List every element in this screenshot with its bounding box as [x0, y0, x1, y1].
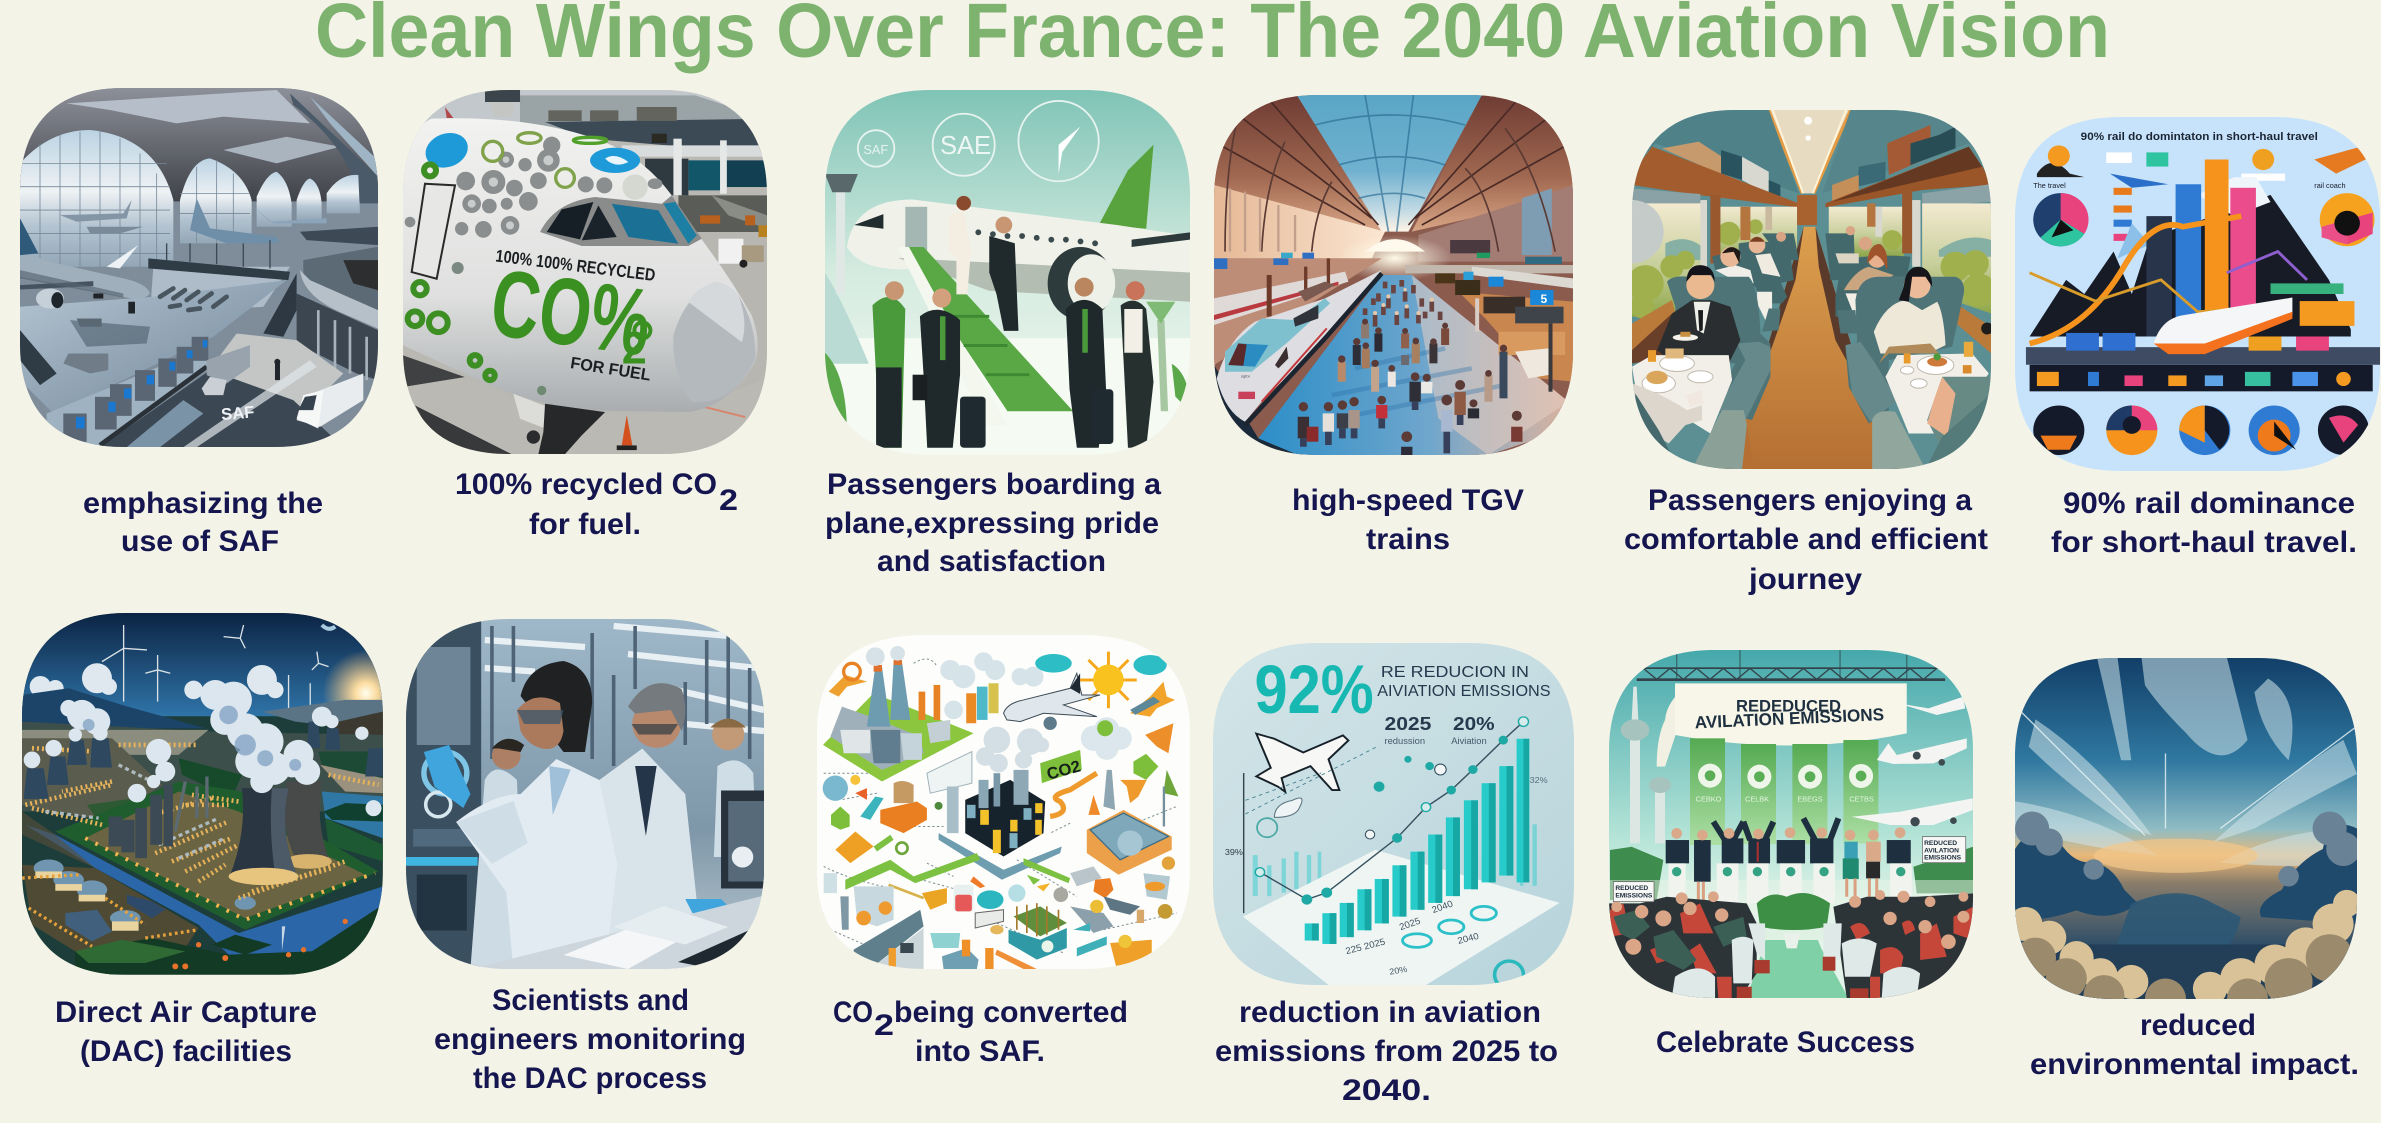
caption: for short-haul travel. — [2051, 526, 2357, 559]
caption: emissions from 2025 to — [1215, 1035, 1558, 1068]
caption: high-speed TGV — [1292, 484, 1524, 517]
caption: the DAC process — [473, 1062, 707, 1095]
image: celebration event: EMISSIONS — [1924, 854, 1962, 861]
panel: celebrate success — [1609, 650, 1973, 1059]
caption — [1624, 484, 1988, 596]
caption — [55, 996, 317, 1068]
image: passengers boarding a plane: SAF — [863, 142, 888, 157]
image: plane nose with CO2 livery: CO% — [485, 250, 657, 377]
image: celebration event: CELBK — [1745, 795, 1769, 804]
image: airport terminal: SAF — [220, 402, 255, 424]
caption: use of SAF — [121, 525, 279, 558]
image: 92 percent reduction chart: 2025 — [1398, 916, 1422, 933]
image: clean sky above clouds — [2015, 658, 2357, 999]
image: 92 percent reduction chart: 20% — [1453, 715, 1495, 735]
caption: comfortable and efficient — [1624, 523, 1988, 556]
panel: CO2 conversion — [817, 635, 1190, 1068]
caption — [434, 984, 746, 1095]
image: isometric CO2 to SAF map — [817, 635, 1190, 969]
caption — [825, 468, 1161, 578]
caption — [455, 468, 738, 541]
image: 92 percent reduction chart: redussion — [1384, 736, 1425, 746]
image: high-speed train station: 5 — [1541, 292, 1548, 306]
image: celebration event — [1609, 650, 1973, 998]
caption: environmental impact. — [2030, 1048, 2359, 1081]
image: 92 percent reduction chart: 225 2025 — [1344, 937, 1387, 957]
caption: Celebrate Success — [1656, 1026, 1915, 1059]
image: 92 percent reduction chart: 20% — [1388, 964, 1408, 977]
caption: 100% recycled CO — [455, 468, 717, 501]
image: high-speed train station — [1214, 95, 1573, 455]
panel: rail dominance — [2015, 117, 2380, 559]
image: 92 percent reduction chart: 2040 — [1456, 931, 1480, 947]
caption: emphasizing the — [83, 487, 323, 520]
caption: Direct Air Capture — [55, 996, 317, 1029]
caption: 2 — [874, 1009, 894, 1042]
image: rail dominance infographic: 90% rail do domintaton in short-haul travel — [2081, 131, 2318, 143]
caption: being converted — [894, 996, 1128, 1029]
caption — [2030, 1009, 2359, 1081]
image: celebration event: REDUCED — [1924, 840, 1957, 847]
caption — [1215, 996, 1558, 1107]
panel: Direct Air Capture — [22, 613, 409, 1068]
caption: 2040. — [1342, 1074, 1431, 1107]
panel: TGV station — [1214, 95, 1573, 556]
caption: into SAF. — [915, 1035, 1045, 1068]
caption — [833, 996, 1128, 1068]
panel: reduced impact — [2008, 658, 2360, 1081]
image: 92 percent reduction chart: 39% — [1225, 847, 1243, 857]
image: celebration event: CEBKO — [1696, 795, 1722, 804]
caption: Scientists and — [492, 984, 689, 1017]
caption: trains — [1366, 523, 1450, 556]
image: rail dominance infographic: The travel — [2033, 181, 2066, 190]
caption — [2051, 487, 2357, 559]
image: 92 percent reduction chart: 2040 — [1430, 899, 1455, 916]
image: rail dominance infographic: rail coach — [2314, 181, 2346, 190]
image: DAC facility at dusk — [22, 613, 383, 975]
caption — [1292, 484, 1524, 556]
caption: reduced — [2140, 1009, 2256, 1042]
caption: CO — [833, 996, 873, 1029]
image: celebration event: CETBS — [1849, 795, 1874, 804]
image: 92 percent reduction chart: 92% — [1255, 651, 1374, 728]
image: celebration event: AVILATION — [1924, 847, 1959, 854]
panel: emissions reduction — [1213, 643, 1574, 1107]
image: train interior dining — [1632, 110, 1991, 469]
caption: for fuel. — [529, 508, 641, 541]
image: airport terminal — [20, 88, 378, 447]
caption: and satisfaction — [877, 545, 1106, 578]
image: celebration event: REDUCED — [1615, 885, 1648, 892]
caption: Passengers enjoying a — [1648, 484, 1972, 517]
caption: reduction in aviation — [1239, 996, 1541, 1029]
image: scientists monitoring the DAC process — [406, 619, 764, 969]
panel: SAF airport — [20, 88, 378, 558]
image: celebration event: AVILATION EMISSIONS — [1694, 704, 1884, 732]
image: passengers boarding a plane: SAE — [940, 132, 991, 160]
caption: plane,expressing pride — [825, 507, 1159, 540]
panel: recycled CO2 — [403, 90, 767, 541]
image: 92 percent reduction chart: Aiviation — [1451, 736, 1487, 746]
image: celebration event: REDEDUCED — [1736, 697, 1841, 716]
image: celebration event: EMISSIONS — [1615, 892, 1653, 899]
image: 92 percent reduction chart: RE REDUCION IN — [1381, 664, 1529, 681]
caption: (DAC) facilities — [80, 1035, 292, 1068]
caption — [83, 487, 323, 558]
image: 92 percent reduction chart: AIVIATION EMISSIONS — [1377, 682, 1551, 700]
image: plane nose with CO2 livery: 2 — [622, 323, 647, 374]
panel: comfortable journey — [1600, 110, 1996, 596]
panel: scientists — [406, 619, 764, 1095]
image: isometric CO2 to SAF map: CO2 — [1045, 757, 1083, 784]
image: 92 percent reduction chart: 32% — [1530, 775, 1548, 785]
caption: 90% rail dominance — [2063, 487, 2355, 520]
image: celebration event: EBEGS — [1797, 795, 1823, 804]
panel: passengers boarding — [825, 90, 1190, 578]
image: 92 percent reduction chart: 2025 — [1384, 715, 1432, 735]
image: high-speed train station: sqfor — [1241, 374, 1251, 379]
image: plane nose with CO2 livery — [403, 90, 767, 454]
caption: engineers monitoring — [434, 1023, 746, 1056]
image: rail dominance infographic — [2015, 117, 2380, 471]
image: 92 percent reduction chart — [1213, 643, 1574, 985]
caption: 2 — [719, 484, 738, 517]
image: plane nose with CO2 livery: FOR FUEL — [569, 353, 652, 385]
image: passengers boarding a plane — [825, 90, 1190, 455]
image: plane nose with CO2 livery: 100% 100% RECYCLED — [495, 245, 656, 285]
caption: journey — [1748, 563, 1862, 596]
caption: Passengers boarding a — [827, 468, 1161, 501]
